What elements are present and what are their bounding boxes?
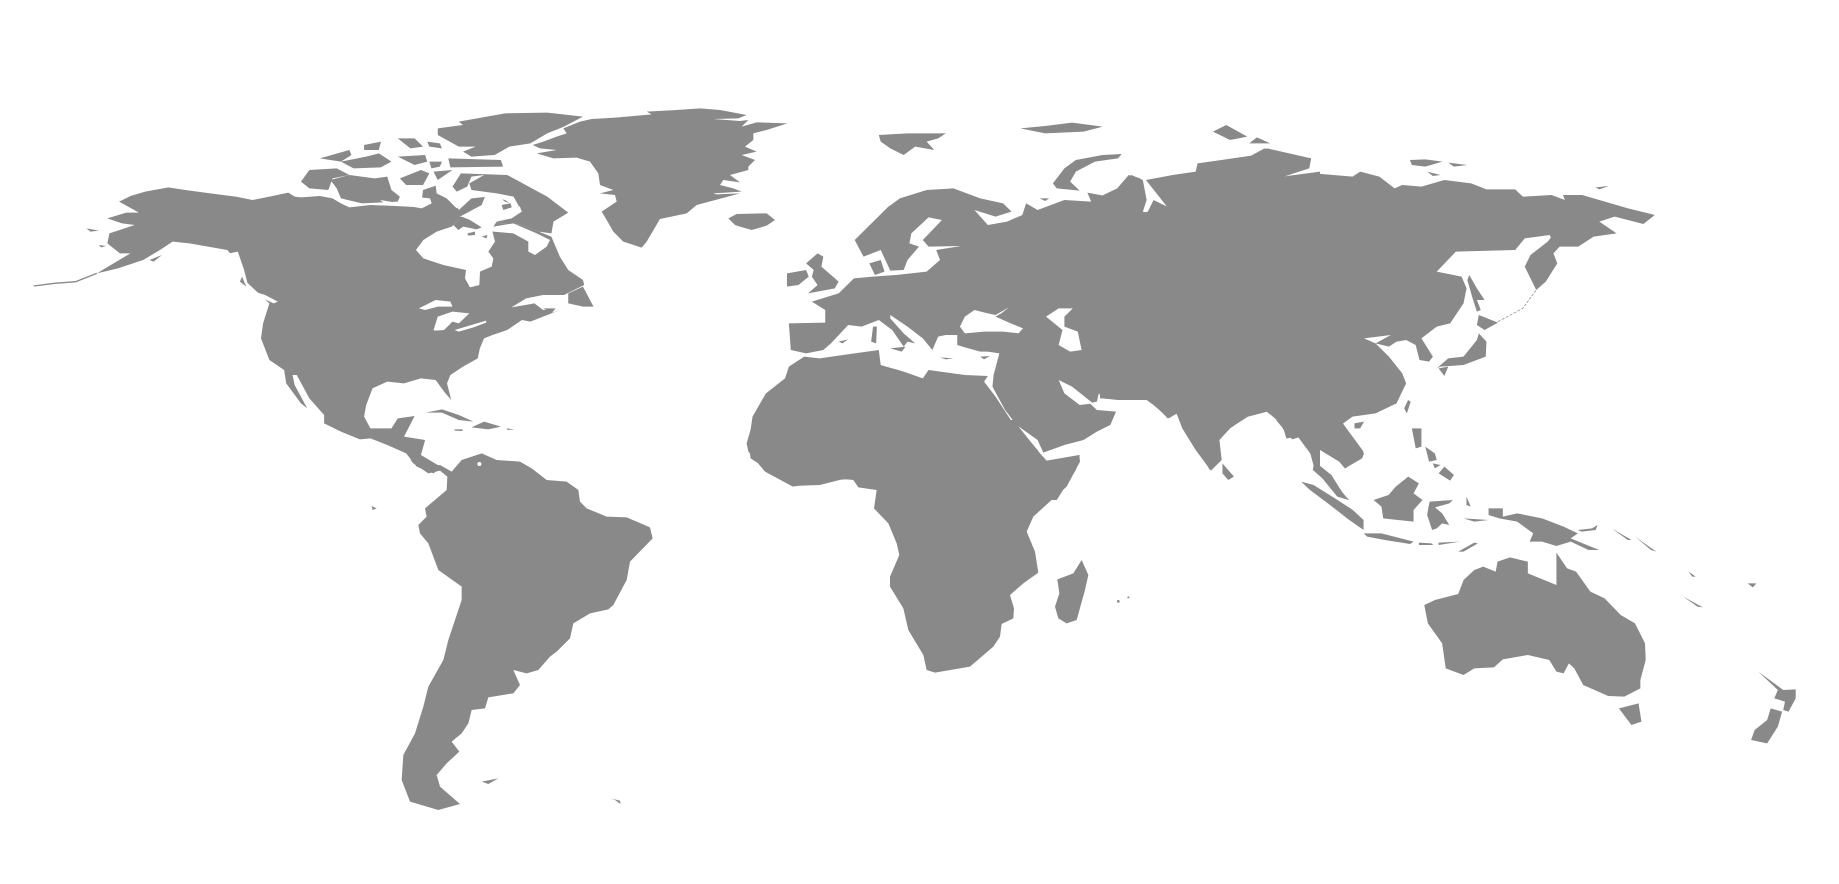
Tasmania — [1619, 703, 1641, 725]
North America — [34, 113, 593, 473]
South America — [372, 453, 653, 810]
Russian Arctic islands — [1213, 125, 1609, 189]
Africa south — [747, 420, 1129, 673]
European islands — [787, 123, 1122, 359]
Black Sea and Caspian Sea — [960, 307, 1093, 405]
Arctic archipelago — [301, 113, 583, 233]
Caribbean islands — [426, 409, 514, 431]
Africa north — [749, 350, 1080, 500]
Taiwan, Hainan, Sri Lanka, Philippines — [1222, 400, 1454, 481]
New Zealand — [1751, 672, 1796, 743]
Indonesian islands — [1301, 477, 1489, 552]
Australia — [1424, 553, 1646, 697]
Falkland Islands and South Georgia — [372, 506, 621, 804]
Hudson Bay and Foxe Basin — [380, 175, 550, 287]
New Guinea — [1489, 508, 1599, 550]
Eurasia east — [1100, 125, 1655, 500]
Alaskan islands — [86, 228, 162, 262]
Madagascar — [1055, 560, 1088, 623]
Kamchatka — [1525, 237, 1561, 290]
Pacific islands — [1578, 525, 1756, 607]
Japan and Sakhalin — [1437, 275, 1498, 376]
Eurasia west and North Africa — [749, 123, 1320, 500]
Greenland and Iceland — [533, 108, 787, 248]
Southeast Asia and Oceania — [1276, 420, 1796, 743]
